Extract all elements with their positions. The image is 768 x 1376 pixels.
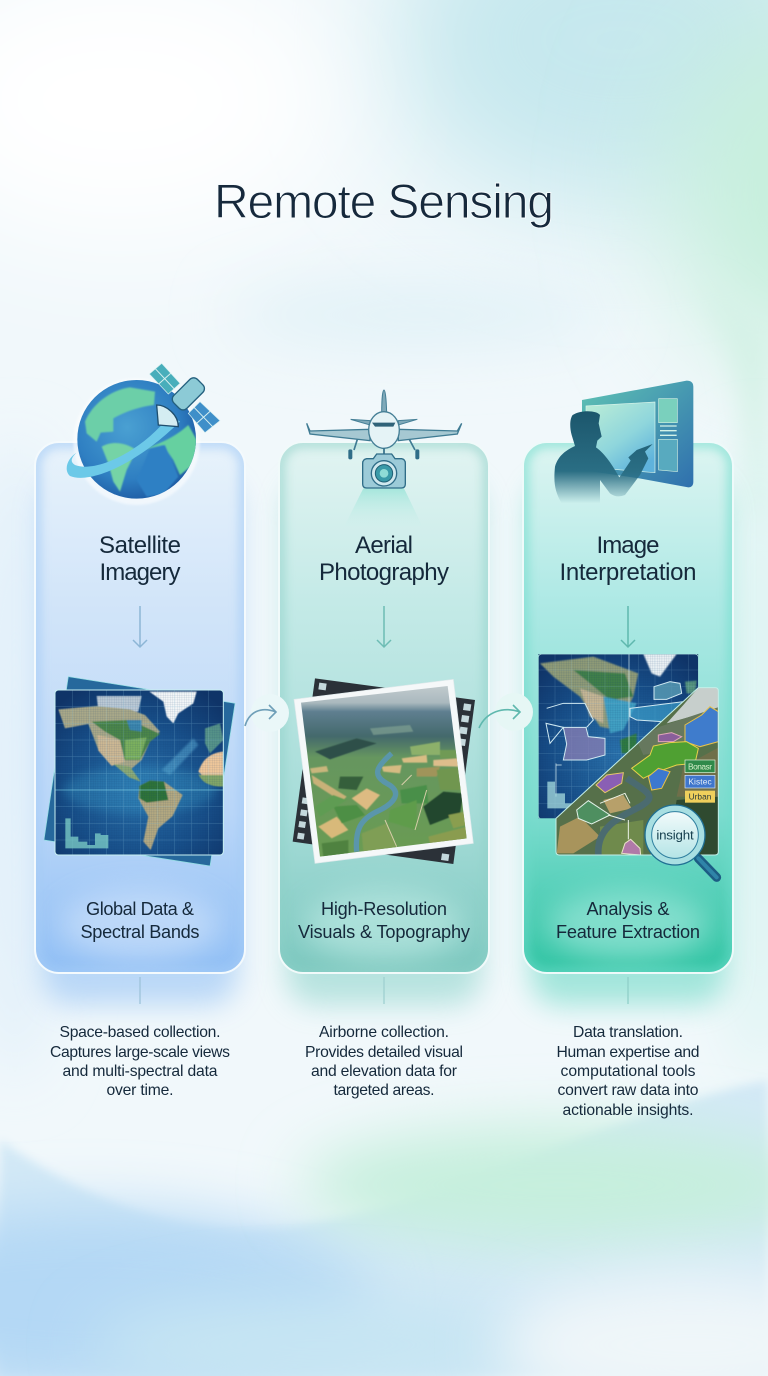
- orbit ring: [67, 415, 180, 478]
- film strip: [293, 678, 475, 864]
- title: Remote Sensing: [214, 176, 554, 229]
- description: aerial: targeted areas.: [334, 1082, 434, 1099]
- description: interpretation: Data translation.: [573, 1024, 683, 1041]
- description: interpretation: computational tools: [560, 1063, 696, 1080]
- heading: image interpretation: Image: [596, 532, 660, 559]
- region outlines: [563, 727, 605, 760]
- classified regions: [685, 707, 718, 747]
- arrow: down to photo: [377, 606, 391, 647]
- satellite data map stack: [44, 677, 235, 866]
- card glows: [42, 480, 726, 1005]
- arrow: down to map overlay: [621, 606, 635, 647]
- map: [55, 690, 223, 855]
- spectral histogram: [65, 818, 108, 848]
- subtitle: [556, 899, 700, 942]
- panel: image interpretation: [523, 442, 733, 973]
- grid: [55, 690, 223, 855]
- panel: aerial photography: [279, 442, 489, 973]
- classified photo half: [553, 687, 720, 857]
- icon: airplane with camera: [307, 390, 462, 528]
- aerial photo stack: [290, 678, 477, 864]
- satellite: [149, 363, 220, 433]
- map half: [538, 654, 698, 819]
- subtitle: [298, 899, 471, 942]
- description: satellite: Captures large-scale views: [50, 1044, 230, 1061]
- description: interpretation: Human expertise and: [556, 1044, 700, 1061]
- card 1 background: [35, 442, 245, 973]
- arrow: aerial to interpretation: [479, 693, 533, 731]
- heading: aerial photography: [319, 532, 449, 586]
- heading: satellite imagery: [99, 532, 181, 586]
- legend chips: [685, 760, 715, 803]
- description: interpretation: convert raw data into: [558, 1082, 699, 1099]
- description: aerial: Airborne collection.: [319, 1024, 449, 1041]
- description: satellite: over time.: [106, 1082, 174, 1099]
- heading: image interpretation: Interpretation: [560, 559, 696, 586]
- description: interpretation: actionable insights.: [562, 1102, 694, 1119]
- subtitle: Global Data &: [86, 899, 194, 919]
- description: satellite: and multi-spectral data: [62, 1063, 218, 1080]
- subtitle: [80, 899, 200, 942]
- card 3 background: [523, 442, 733, 973]
- heading: satellite imagery: Satellite: [99, 532, 181, 559]
- legend chips: Urban: [689, 792, 712, 802]
- white frame: [294, 679, 473, 863]
- description: interpretation: [556, 1024, 700, 1119]
- description: aerial: [305, 1024, 463, 1099]
- person silhouette: [554, 411, 653, 503]
- icon: analyst at touch screen: [554, 381, 693, 503]
- subtitle: Feature Extraction: [556, 922, 700, 942]
- heading: satellite imagery: Imagery: [100, 559, 180, 586]
- icon: globe with satellite: [67, 363, 220, 505]
- back sheet: [44, 677, 235, 866]
- arrow: satellite to aerial: [245, 694, 289, 732]
- description: aerial: Provides detailed visual: [305, 1044, 463, 1061]
- description: satellite: Space-based collection.: [60, 1024, 220, 1041]
- subtitle: Spectral Bands: [80, 922, 200, 942]
- subtitle: Visuals & Topography: [298, 922, 471, 942]
- subtitle: Analysis &: [586, 899, 670, 919]
- landscape: [301, 686, 467, 856]
- heading: aerial photography: Aerial: [355, 532, 413, 559]
- heading: aerial photography: Photography: [319, 559, 449, 586]
- heading: image interpretation: [560, 532, 696, 586]
- continents: [58, 692, 223, 850]
- description: satellite: [50, 1024, 230, 1099]
- description: aerial: and elevation data for: [311, 1063, 457, 1080]
- panel: satellite imagery: [35, 442, 245, 973]
- legend chips: Kistec: [688, 777, 712, 787]
- screen: [582, 381, 693, 487]
- arrow: down to map: [133, 606, 147, 647]
- magnifier: insight: [656, 828, 694, 843]
- interpreted map and classified photo overlay: [538, 654, 720, 877]
- subtitle: High-Resolution: [321, 899, 447, 919]
- legend chips: Bonasr: [688, 761, 712, 771]
- beam: [343, 488, 423, 528]
- magnifier: [645, 805, 717, 877]
- card 2 background: [279, 442, 489, 973]
- connector lines: [140, 977, 628, 1004]
